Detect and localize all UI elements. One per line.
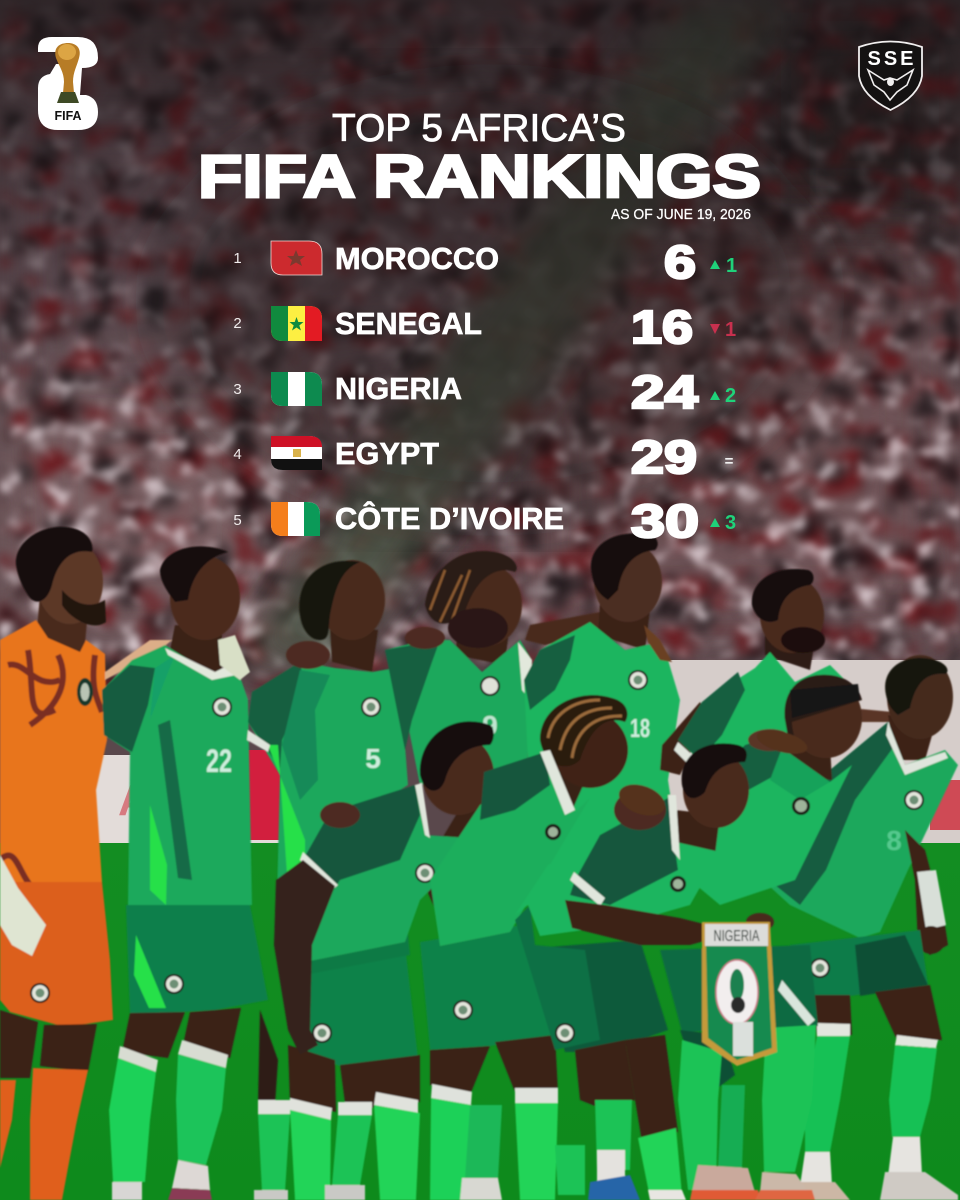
row 3: Nigeria: 3: [233, 381, 242, 398]
crowd dark patches: [0, 0, 960, 700]
rank unchanged: =: [725, 453, 734, 470]
row 3: Nigeria: 24: [631, 366, 699, 418]
row 1: Morocco: MOROCCO: [335, 241, 499, 276]
player: goalkeeper in orange: [0, 527, 113, 1200]
pitch-side advertising boards: [90, 660, 960, 847]
logo: SSE shield: SSE: [868, 48, 914, 70]
rank change up 2: [710, 385, 736, 407]
row 1: Morocco: 6: [664, 236, 696, 288]
player: number 18: [524, 533, 680, 880]
top darkening: [0, 0, 960, 420]
player: number 5: [247, 560, 408, 950]
row 2: Senegal: 16: [631, 301, 693, 353]
row 1: Morocco: 1: [233, 250, 242, 267]
rank change up 2: 2: [725, 385, 736, 407]
rank change up 1: [710, 255, 737, 277]
blurred stand tones: [0, 0, 960, 640]
row 4: Egypt: EGYPT: [335, 436, 439, 471]
rank change down 1: [710, 319, 736, 341]
heading: fifa rankings: FIFA RANKINGS: [198, 143, 761, 210]
stairway aisle: [245, 0, 790, 660]
crowd whites: [0, 0, 960, 700]
row 4: Egypt: 29: [631, 431, 697, 483]
row 3: Nigeria: NIGERIA: [335, 371, 462, 406]
player: number 9: 9: [482, 710, 498, 741]
row 4: Egypt: [233, 431, 734, 483]
grass pitch: [0, 843, 960, 1200]
team pennant: NIGERIA: [714, 928, 760, 945]
pitch-side advertising boards: AC: [118, 776, 182, 825]
flag: Cote d'Ivoire: [271, 502, 320, 536]
row 2: Senegal: 2: [233, 315, 242, 332]
date note: AS OF JUNE 19, 2026: [611, 207, 751, 223]
player: headband: [696, 675, 862, 905]
rank change up 3: 3: [725, 512, 736, 534]
rank change up 1: 1: [726, 255, 737, 277]
row 3: Nigeria: [233, 366, 736, 418]
logo: FIFA World Cup 26: FIFA: [54, 108, 82, 123]
flag: Senegal: [271, 306, 322, 341]
row 5: Cote d'Ivoire: 5: [233, 512, 242, 529]
player: number 5: 5: [365, 743, 381, 774]
flag: Morocco: [271, 241, 322, 275]
row 5: Cote d'Ivoire: CÔTE D’IVOIRE: [335, 500, 564, 536]
player: back row right: [660, 569, 892, 775]
row 5: Cote d'Ivoire: [233, 495, 736, 547]
title: [198, 107, 761, 223]
row 5: Cote d'Ivoire: 30: [631, 495, 699, 547]
background photo: stadium crowd: [0, 0, 960, 860]
row 4: Egypt: 4: [233, 446, 242, 463]
logo: SSE shield: [859, 42, 922, 110]
player: number 8: 8: [886, 825, 902, 856]
player: front row, rasta hair: [420, 695, 628, 1200]
row 2: Senegal: SENEGAL: [335, 306, 482, 341]
team photo: players: [0, 527, 958, 1200]
heading: top 5 africa's: TOP 5 AFRICA’S: [332, 107, 626, 150]
icon: gold trophy: [55, 43, 80, 103]
player: number 22: 22: [206, 743, 232, 779]
player: number 9: [385, 551, 532, 785]
logo: FIFA World Cup 26: [38, 37, 98, 130]
team pennant: [702, 922, 777, 1066]
flag: Nigeria: [271, 372, 322, 406]
row 2: Senegal: [233, 301, 736, 353]
flag: Egypt: [271, 436, 322, 470]
rank change up 3: [710, 512, 736, 534]
hands over shoulders: [615, 726, 810, 821]
dark centre behind the table: [160, 90, 820, 510]
player: front row, wearing shorts with crest: [254, 721, 495, 1200]
rank change down 1: 1: [725, 319, 736, 341]
player: number 18: 18: [630, 713, 650, 743]
row 1: Morocco: [233, 236, 737, 288]
player: number 22: [102, 546, 268, 1200]
player: front row, holding pennant: [515, 743, 774, 1200]
player: behind team captain legs: [660, 945, 818, 1200]
player: number 8: [768, 655, 958, 1200]
crowd reds: [0, 0, 960, 700]
